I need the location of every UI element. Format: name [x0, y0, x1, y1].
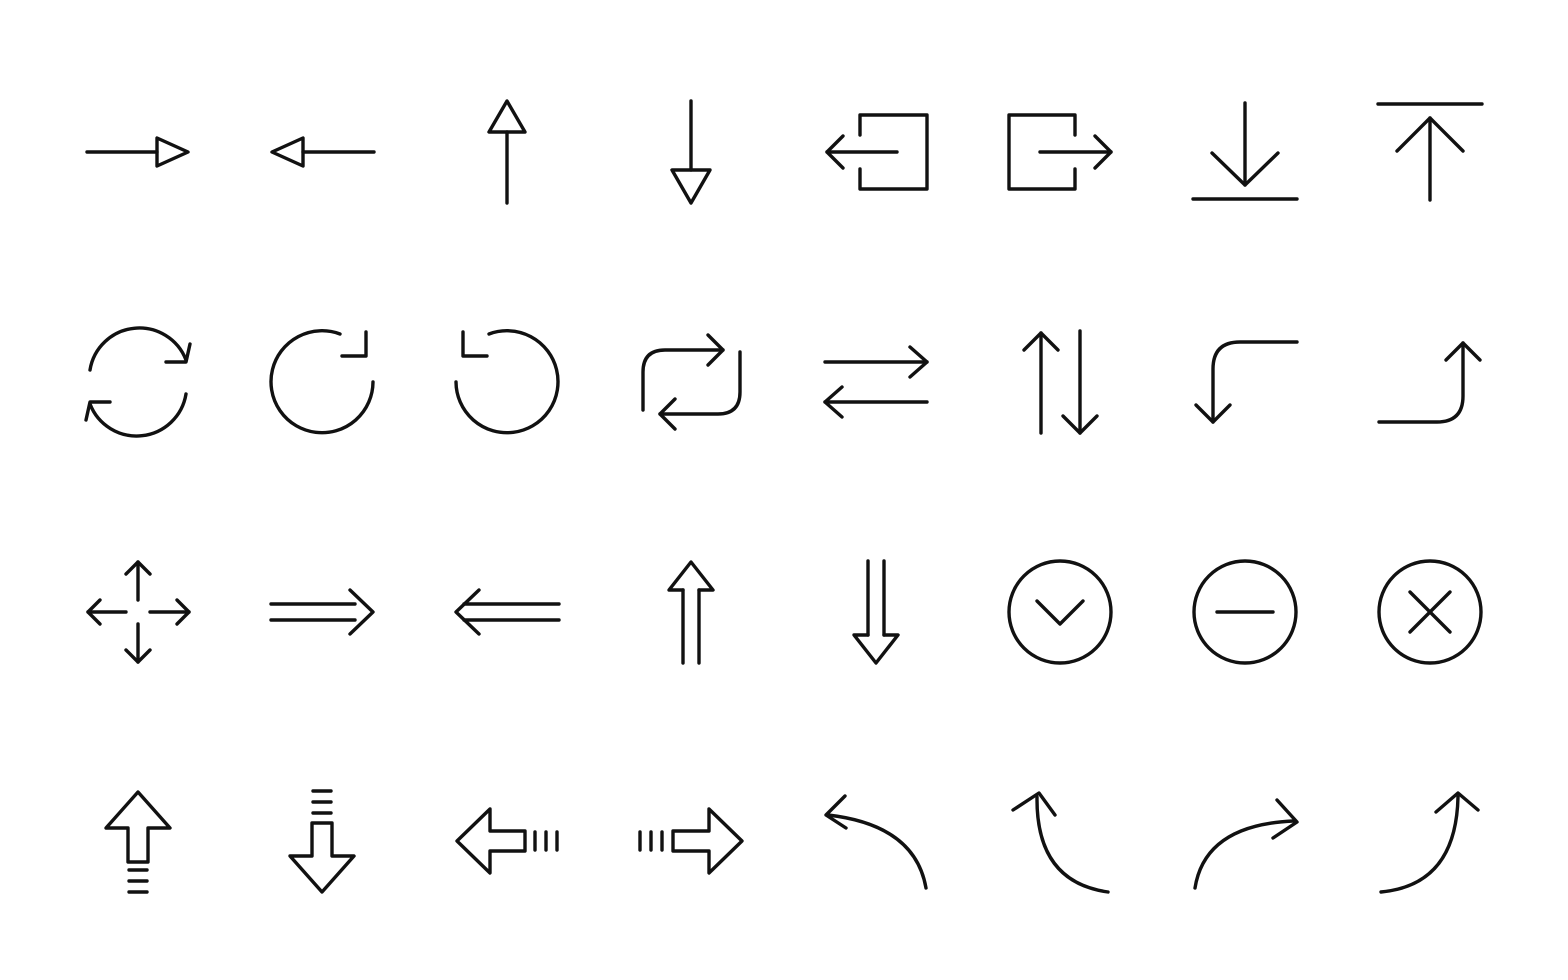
icon: curved arrow right	[1195, 800, 1297, 888]
icon: double arrow right	[271, 590, 373, 634]
icon: double arrow left	[456, 590, 559, 634]
icon: exchange horizontal	[825, 347, 927, 417]
icon: curved arrow up-right	[1381, 793, 1478, 892]
icon: rotate counterclockwise	[456, 331, 558, 433]
icon: block arrow down	[290, 791, 354, 892]
icon: block arrow up	[106, 792, 170, 892]
icon: turn up	[1379, 343, 1480, 422]
icon: circle minus	[1194, 561, 1296, 663]
icon: upload	[1378, 104, 1482, 200]
icon: arrow up	[489, 101, 525, 203]
icon: block arrow left	[457, 809, 557, 873]
icon: curved arrow up-left 2	[1013, 793, 1108, 892]
icon: curved arrow up-left	[826, 796, 926, 888]
icon: circle chevron down	[1009, 561, 1111, 663]
icon: double arrow up	[669, 562, 713, 663]
icon: move	[88, 562, 189, 662]
icon: sign in	[827, 115, 927, 189]
icon: arrow right	[87, 138, 188, 166]
icon: exchange vertical	[1024, 331, 1097, 433]
icon: arrow left	[272, 138, 374, 166]
icon: repeat	[643, 335, 740, 429]
icon: download	[1193, 103, 1297, 199]
icon: refresh	[86, 328, 190, 436]
icon: sign out	[1009, 115, 1111, 189]
icon: circle close	[1379, 561, 1481, 663]
icon: turn down	[1196, 342, 1297, 422]
icon: rotate clockwise	[271, 331, 373, 433]
icon: block arrow right	[640, 809, 742, 873]
icon: double arrow down	[854, 561, 898, 663]
icon: arrow down	[672, 101, 710, 203]
